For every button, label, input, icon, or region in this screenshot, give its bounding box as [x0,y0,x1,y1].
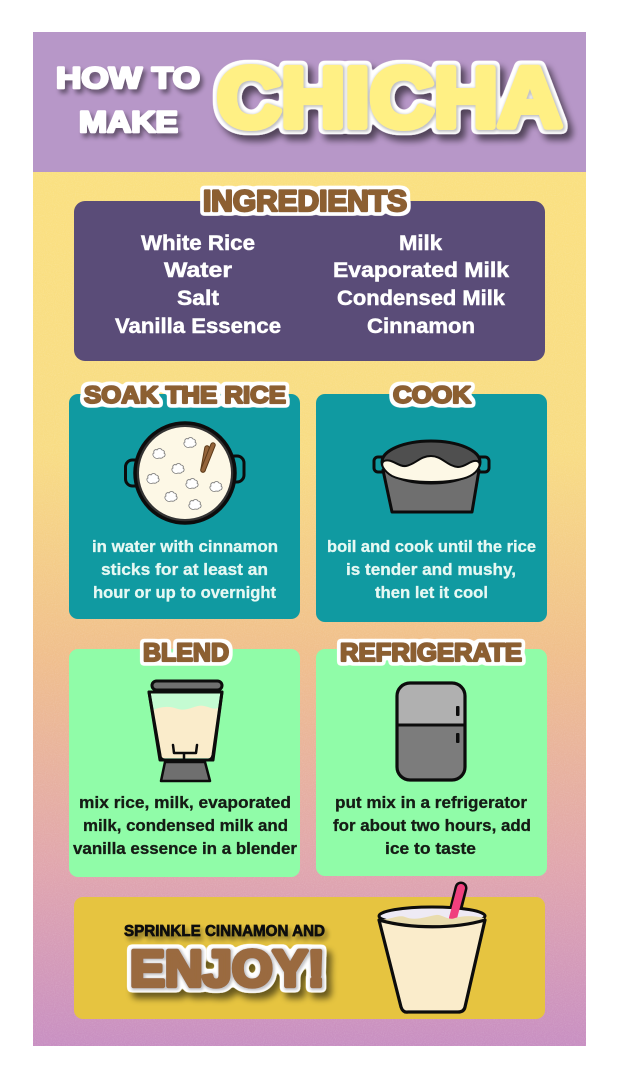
ingredient list: left column: Water [164,259,232,282]
ingredient list: right column: Condensed Milk [337,287,505,310]
ingredient list: left column: Salt [177,287,219,310]
ingredient list: right column [333,232,509,338]
title: how to make: MAKE [79,106,178,139]
icon: straw [453,888,461,920]
step text: blend: vanilla essence in a blender [73,839,297,858]
panel: cook [316,382,547,622]
step text: cook: is tender and mushy, [346,560,516,579]
text: enjoy: ENJOY! [130,940,325,997]
heading: soak the rice: SOAK THE RICE [84,382,286,409]
step text: soak: sticks for at least an [101,560,268,579]
step text: blend [73,793,297,858]
heading: refrigerate: REFRIGERATE [340,639,522,667]
step text: refrigerate [333,793,531,858]
panel: blend [69,639,300,877]
step text: cook: then let it cool [375,583,488,602]
icon: rice mush [382,456,480,482]
step text: refrigerate: put mix in a refrigerator [335,793,527,812]
panel: refrigerate [316,639,547,876]
icon: cooking pot [374,441,489,512]
panel: ingredients [74,185,545,361]
ingredient list: right column: Evaporated Milk [333,259,509,282]
icon: pot of soaking rice [126,423,244,523]
text: sprinkle cinnamon and: SPRINKLE CINNAMON AND [124,923,325,940]
heading: blend: BLEND [143,639,229,667]
step text: blend: milk, condensed milk and [83,816,288,835]
heading: ingredients: INGREDIENTS [203,185,407,218]
icon: blender [149,681,222,781]
heading: cook: COOK [393,382,472,409]
ingredient list: left column: Vanilla Essence [115,315,281,338]
title: how to make: HOW TO [56,62,200,95]
step text: soak: in water with cinnamon [92,537,278,556]
icon: cup of chicha [379,888,485,1012]
step text: refrigerate: for about two hours, add [333,816,531,835]
step text: blend: mix rice, milk, evaporated [79,793,291,812]
header band [33,32,586,172]
icon: refrigerator [397,683,465,780]
panel: enjoy [74,888,545,1019]
icon: cinnamon sticks [203,445,213,470]
step text: soak [92,537,278,602]
step text: refrigerate: ice to taste [385,839,476,858]
background gradient [33,172,586,1046]
panel: soak the rice [69,382,300,619]
step text: cook [327,537,536,602]
ingredient list: left column [115,232,281,338]
ingredient list: right column: Cinnamon [367,315,475,338]
step text: cook: boil and cook until the rice [327,537,536,556]
ingredient list: left column: White Rice [141,232,255,255]
title: how to make [56,62,200,139]
step text: soak: hour or up to overnight [93,583,276,602]
title: chicha: CHICHA [217,50,562,144]
ingredient list: right column: Milk [399,232,442,255]
